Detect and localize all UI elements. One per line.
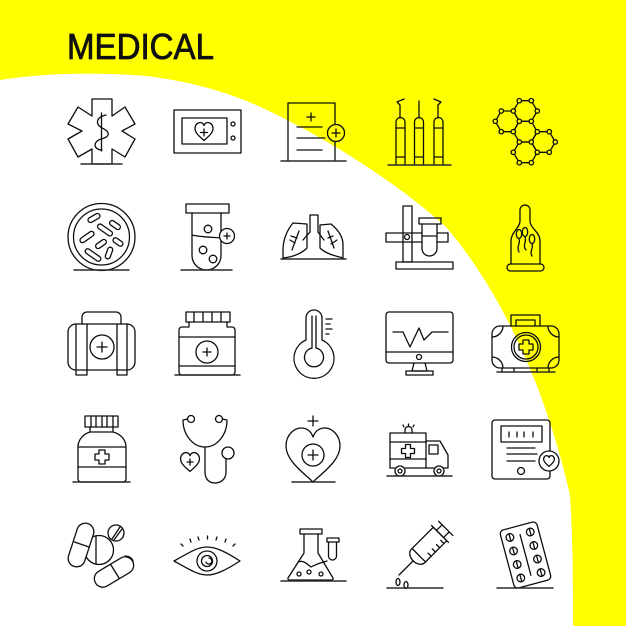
icon: condom with sperm xyxy=(507,205,544,271)
icon: petri dish xyxy=(68,204,135,270)
icon: ECG monitor xyxy=(386,312,453,375)
icon: lungs xyxy=(281,215,346,259)
icon: syringe xyxy=(387,520,454,588)
icon: heart monitor box xyxy=(174,110,241,153)
icon: pill bottle xyxy=(73,416,130,482)
icon: stethoscope xyxy=(181,416,234,483)
icon: ambulance xyxy=(387,424,452,476)
icon: thermometer xyxy=(294,310,334,378)
title: MEDICAL xyxy=(67,26,214,67)
icon: first aid kit xyxy=(68,312,135,375)
icon: medicine jar xyxy=(175,312,240,375)
icon: blister pack xyxy=(497,521,553,589)
icon: dental tools xyxy=(388,99,451,165)
icon: pills xyxy=(66,521,137,590)
icon: medical case xyxy=(492,315,559,372)
icon: lab clamp stand xyxy=(386,206,453,269)
icon: medical document xyxy=(281,103,346,161)
icon: heart with plus xyxy=(286,416,340,482)
icon: test tube xyxy=(181,204,234,270)
icon: molecule xyxy=(493,98,558,165)
icon: flask and tube xyxy=(281,529,346,581)
icon: eye xyxy=(174,536,240,575)
icon: medical device with heart xyxy=(492,420,559,479)
icon: star of life xyxy=(68,99,135,164)
